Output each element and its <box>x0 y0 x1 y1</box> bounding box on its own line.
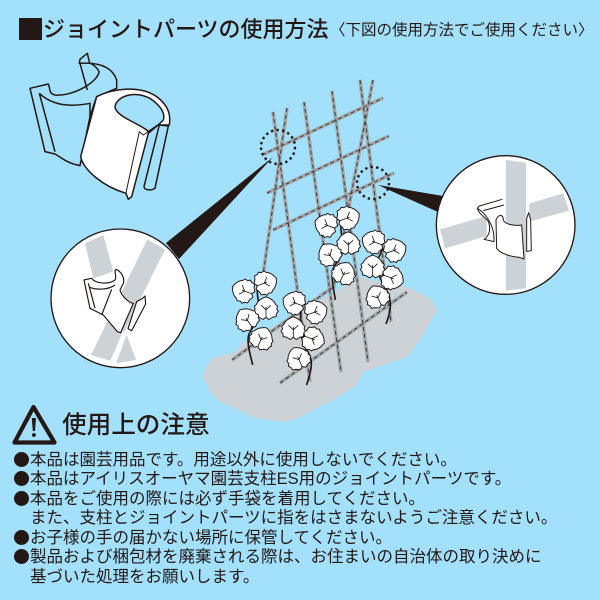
item 2 <box>14 470 511 488</box>
title square <box>19 18 42 40</box>
side rail <box>144 125 168 190</box>
plant 2 <box>279 287 331 385</box>
caution list: 本品は園芸用品です。用途以外に使用しないでください。 <box>30 451 457 469</box>
pointer: left <box>166 157 273 259</box>
detail circle: right <box>436 156 575 294</box>
joint opening <box>115 95 164 132</box>
caution heading: 使用上の注意 <box>62 412 210 439</box>
warning icon <box>14 407 54 442</box>
plant 1 <box>228 267 281 365</box>
detail circle: left <box>51 229 190 368</box>
plant 4 <box>358 226 410 324</box>
caution list: また、支柱とジョイントパーツに指をはさまないようご注意ください。 <box>30 509 557 527</box>
item 5 <box>14 548 542 566</box>
item 1 <box>14 450 457 469</box>
back half of joint <box>30 53 117 166</box>
plant 3 <box>311 202 363 300</box>
dotted circle: right joint <box>357 167 389 199</box>
caution list <box>14 450 557 586</box>
front half of joint <box>81 89 170 199</box>
caution list: お子様の手の届かない場所に保管してください。 <box>30 529 392 547</box>
ground <box>203 277 437 422</box>
item 4 <box>14 528 392 547</box>
dotted circle: left joint <box>261 130 295 164</box>
caution list: 本品をご使用の際には必ず手袋を着用してください。 <box>30 490 425 508</box>
pointer: right <box>378 185 443 212</box>
caution list: 基づいた処理をお願いします。 <box>30 568 259 586</box>
caution list: 製品および梱包材を廃棄される際は、お住まいの自治体の取り決めに <box>30 548 542 566</box>
caution list: 本品はアイリスオーヤマ園芸支柱ES用のジョイントパーツです。 <box>30 470 511 488</box>
joint part enlarged <box>30 53 170 199</box>
small clip <box>84 269 146 333</box>
large clip <box>477 199 531 259</box>
title: ジョイントパーツの使用方法 <box>43 16 329 42</box>
plants <box>228 202 410 385</box>
lattice poles and crossbars <box>232 80 407 383</box>
item 3 <box>14 490 425 508</box>
subtitle: 〈下図の使用方法でご使用ください〉 <box>330 22 594 39</box>
